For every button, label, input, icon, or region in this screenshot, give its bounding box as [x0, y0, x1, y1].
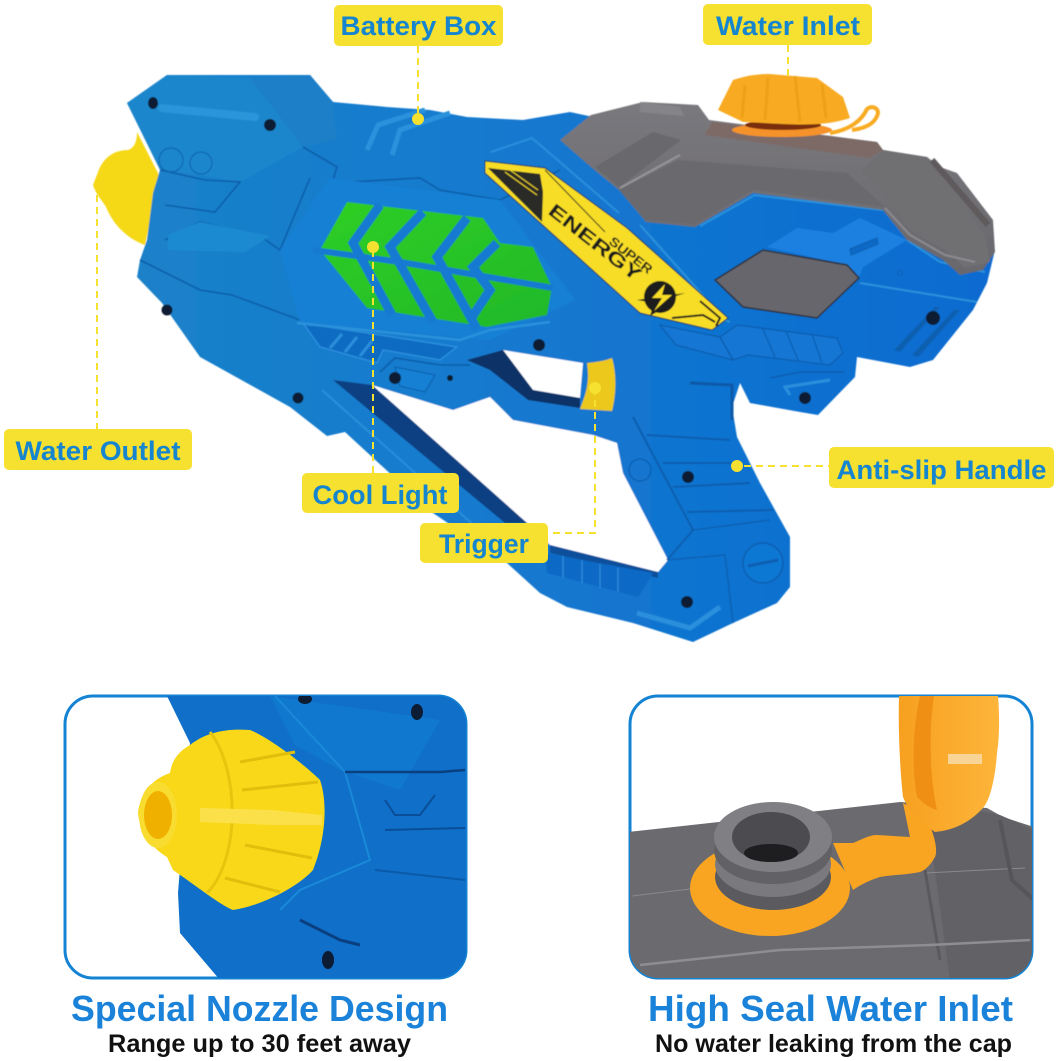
- caption: inlet: No water leaking from the cap: [655, 1030, 1012, 1058]
- tank facets: [595, 132, 681, 187]
- caption: nozzle: Range up to 30 feet away: [108, 1030, 411, 1058]
- caption: inlet: High Seal Water Inlet: [648, 988, 1013, 1029]
- stock ribs: [545, 553, 653, 597]
- nozzle body blue: [167, 696, 470, 980]
- lightning logo: [644, 281, 676, 313]
- caption: inlet: [648, 988, 1013, 1058]
- water gun illustration: [93, 74, 995, 642]
- water cap: [718, 74, 878, 137]
- caption: nozzle: Special Nozzle Design: [71, 988, 448, 1029]
- gun body: [127, 75, 995, 642]
- logo badge: [485, 161, 728, 330]
- window frame: [280, 178, 575, 340]
- callout: water inlet: [703, 4, 872, 76]
- callout: anti-slip handle: [731, 447, 1054, 488]
- trigger: [580, 358, 615, 411]
- orange strap: [833, 803, 936, 890]
- badge wedge: [488, 168, 543, 222]
- gray tank top: [628, 802, 1034, 980]
- caption: nozzle: [71, 988, 448, 1058]
- callout: trigger: [420, 382, 601, 563]
- panel: water inlet close-up: [628, 696, 1034, 980]
- top left pod: [127, 75, 303, 182]
- callout: trigger: Trigger: [439, 529, 529, 559]
- callout: water outlet: [4, 195, 192, 470]
- callout: anti-slip handle: Anti-slip Handle: [836, 455, 1046, 485]
- callout: water outlet: Water Outlet: [16, 436, 181, 466]
- chevron strip above badge: [491, 138, 619, 213]
- yellow nozzle: [138, 730, 325, 910]
- callout: battery box: [334, 5, 503, 125]
- gray water tank: [560, 102, 995, 275]
- handle seams: [633, 417, 693, 560]
- handle screw: [743, 543, 783, 583]
- white window: [372, 385, 668, 572]
- panel seams left: [303, 147, 560, 200]
- tank window: [715, 250, 859, 318]
- handle slot: [637, 607, 720, 628]
- callout: battery box: Battery Box: [340, 11, 496, 41]
- hex strip right lower: [720, 325, 843, 365]
- chevrons: [313, 205, 553, 329]
- neck opening: [732, 812, 810, 862]
- orange lid: [899, 696, 999, 832]
- callout: cool light: Cool Light: [312, 480, 448, 510]
- screw holes: [148, 97, 940, 608]
- panel: nozzle close-up: [65, 694, 470, 980]
- green light panel: [320, 202, 552, 327]
- battery box ridges: [367, 110, 425, 150]
- logo badge: ENERGY: [544, 200, 645, 286]
- side panel right: [767, 218, 907, 278]
- callout: water inlet: Water Inlet: [716, 11, 860, 41]
- nozzle tip: [93, 132, 160, 245]
- logo badge: SUPER: [606, 234, 656, 277]
- threaded neck: [715, 870, 831, 910]
- callout: cool light: [302, 241, 459, 513]
- lower bar: [303, 323, 457, 363]
- stock strut: [322, 390, 505, 553]
- orange ring: [690, 854, 850, 936]
- window shadows: [333, 380, 527, 523]
